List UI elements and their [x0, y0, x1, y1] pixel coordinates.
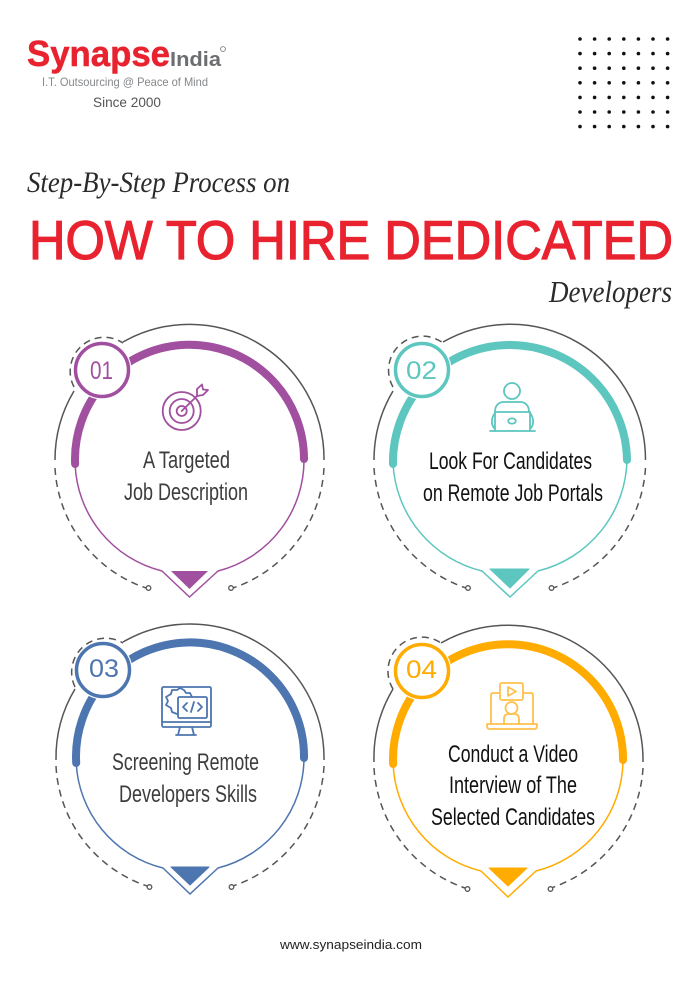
- step label: A Targeted: [143, 447, 230, 474]
- step label: Selected Candidates: [431, 804, 595, 831]
- step label: [124, 447, 248, 506]
- step label: Developers Skills: [119, 781, 257, 808]
- panel: step 02: [374, 324, 646, 597]
- step number badge 01: 01: [90, 357, 113, 385]
- panel: step 03: [56, 624, 324, 894]
- step number badge 01: [72, 340, 132, 400]
- step label: Interview of The: [449, 772, 577, 799]
- step label: Screening Remote: [112, 749, 259, 776]
- dot grid decoration: [578, 37, 669, 128]
- step label: [112, 749, 259, 808]
- step label: Job Description: [124, 479, 248, 506]
- icon: video interview on laptop: [487, 683, 537, 729]
- step label: Conduct a Video: [448, 741, 578, 768]
- icon: person at laptop: [490, 383, 535, 431]
- step number badge 03: 03: [89, 655, 119, 683]
- step label: [431, 741, 595, 831]
- footer website: www.synapseindia.com: [279, 937, 422, 952]
- icon: monitor with gear and code: [162, 687, 211, 735]
- step number badge 04: [392, 642, 452, 700]
- logo: SynapseIndia: Since 2000: [93, 95, 161, 110]
- step number badge 03: [74, 640, 132, 700]
- step number badge 02: 02: [406, 357, 437, 385]
- step label: on Remote Job Portals: [423, 480, 603, 507]
- heading: script line: Step-By-Step Process on: [27, 166, 290, 199]
- icon: target with arrow: [163, 384, 208, 430]
- step label: Look For Candidates: [429, 448, 592, 475]
- logo: SynapseIndia: India: [170, 49, 222, 71]
- step number badge 04: 04: [406, 656, 437, 684]
- logo: SynapseIndia: I.T. Outsourcing @ Peace of Mind: [42, 75, 208, 89]
- heading: script word: Developers: [548, 274, 672, 309]
- step number badge 02: [392, 340, 452, 400]
- logo: SynapseIndia: [27, 33, 225, 110]
- panel: step 04: [374, 625, 643, 897]
- logo: SynapseIndia: Synapse: [27, 33, 170, 74]
- panel: step 01: [55, 324, 324, 597]
- step label: [423, 448, 603, 507]
